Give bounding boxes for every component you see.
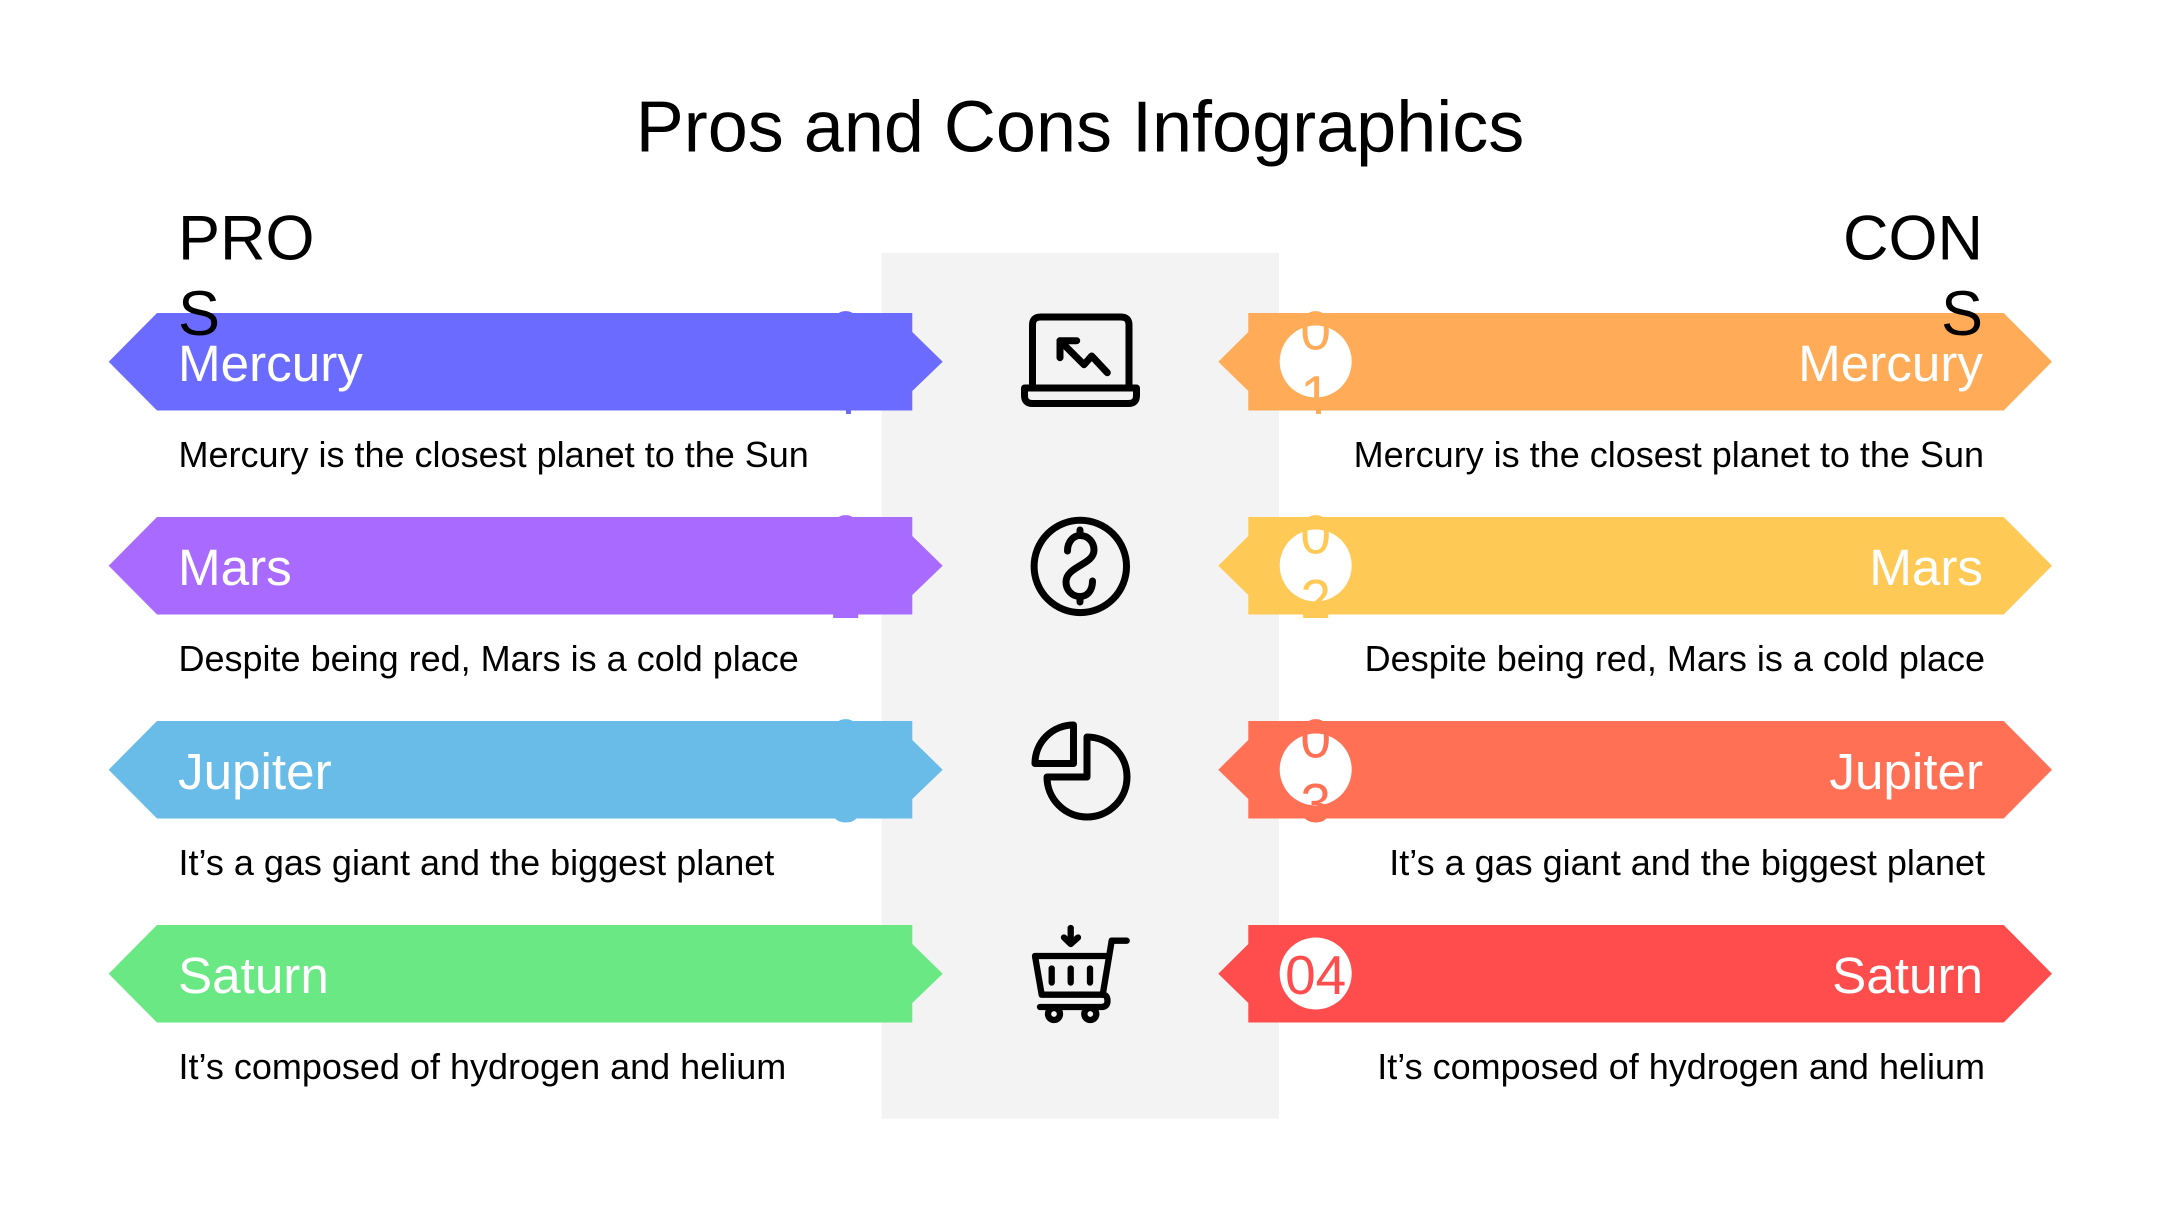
cons row 1: Mercury: [1218, 300, 2052, 475]
pros row 3: Jupiter: [109, 708, 943, 883]
cons number badge 4: [1280, 938, 1352, 1010]
title: Pros and Cons Infographics: [636, 88, 1524, 168]
pros heading: PRO: [178, 203, 315, 273]
cons name 1: Mercury: [1798, 335, 1983, 392]
cons number 4: 04: [1285, 944, 1346, 1006]
pros description 1: Mercury is the closest planet to the Sun: [178, 434, 809, 475]
cons number badge 2: [1280, 530, 1352, 602]
cons name 2: Mars: [1869, 539, 1983, 596]
cons name 3: Jupiter: [1829, 743, 1983, 800]
cons number 2: 0: [1300, 504, 1331, 566]
cons name 4: Saturn: [1832, 947, 1983, 1004]
cons description 2: Despite being red, Mars is a cold place: [1365, 638, 1985, 679]
cons number 1: 1: [1300, 364, 1331, 426]
pros name 1: Mercury: [178, 335, 363, 392]
cons number 2: 2: [1300, 568, 1331, 630]
pros number 3: 3: [830, 772, 861, 834]
cons banner 3: [1218, 721, 2052, 818]
cons banner 2: [1218, 517, 2052, 614]
pros number 1: 0: [830, 300, 861, 362]
pros row 2: Mars: [109, 504, 943, 679]
pros number 3: 0: [830, 708, 861, 770]
icon: laptop with chart arrow: [1024, 317, 1136, 404]
pros banner 2: [109, 517, 943, 614]
center panel: [882, 253, 1279, 1119]
cons row 3: Jupiter: [1218, 708, 2052, 883]
cons row 4: Saturn: [1218, 925, 2052, 1087]
pros heading: S: [178, 279, 220, 349]
cons banner 1: [1218, 313, 2052, 410]
cons heading: S: [1941, 279, 1983, 349]
pros description 3: It’s a gas giant and the biggest planet: [178, 842, 774, 883]
cons row 2: Mars: [1218, 504, 2052, 679]
pros name 2: Mars: [178, 539, 292, 596]
cons number 1: 0: [1300, 300, 1331, 362]
cons description 3: It’s a gas giant and the biggest planet: [1389, 842, 1985, 883]
pros banner 1: [109, 313, 943, 410]
icon: shopping cart: [1035, 928, 1127, 1020]
cons number badge 1: [1280, 326, 1352, 398]
pros number 4: 04: [815, 944, 876, 1006]
cons number 3: 3: [1300, 772, 1331, 834]
cons number badge 3: [1280, 734, 1352, 806]
cons description 4: It’s composed of hydrogen and helium: [1377, 1046, 1985, 1087]
pros name 3: Jupiter: [178, 743, 332, 800]
pros description 2: Despite being red, Mars is a cold place: [178, 638, 799, 679]
pros description 4: It’s composed of hydrogen and helium: [178, 1046, 786, 1087]
cons banner 4: [1218, 925, 2052, 1022]
cons description 1: Mercury is the closest planet to the Sun: [1354, 434, 1984, 475]
cons heading: CON: [1843, 203, 1983, 273]
pros banner 3: [109, 721, 943, 818]
cons number 3: 0: [1300, 708, 1331, 770]
pros number 1: 1: [830, 364, 861, 426]
pros banner 4: [109, 925, 943, 1022]
pros row 4: Saturn: [109, 925, 943, 1087]
pros number 2: 2: [830, 568, 861, 630]
icon: dollar coin: [1034, 520, 1127, 613]
pros number 2: 0: [830, 504, 861, 566]
pros name 4: Saturn: [178, 947, 329, 1004]
icon: pie chart: [1035, 725, 1127, 817]
pros row 1: Mercury: [109, 300, 943, 475]
